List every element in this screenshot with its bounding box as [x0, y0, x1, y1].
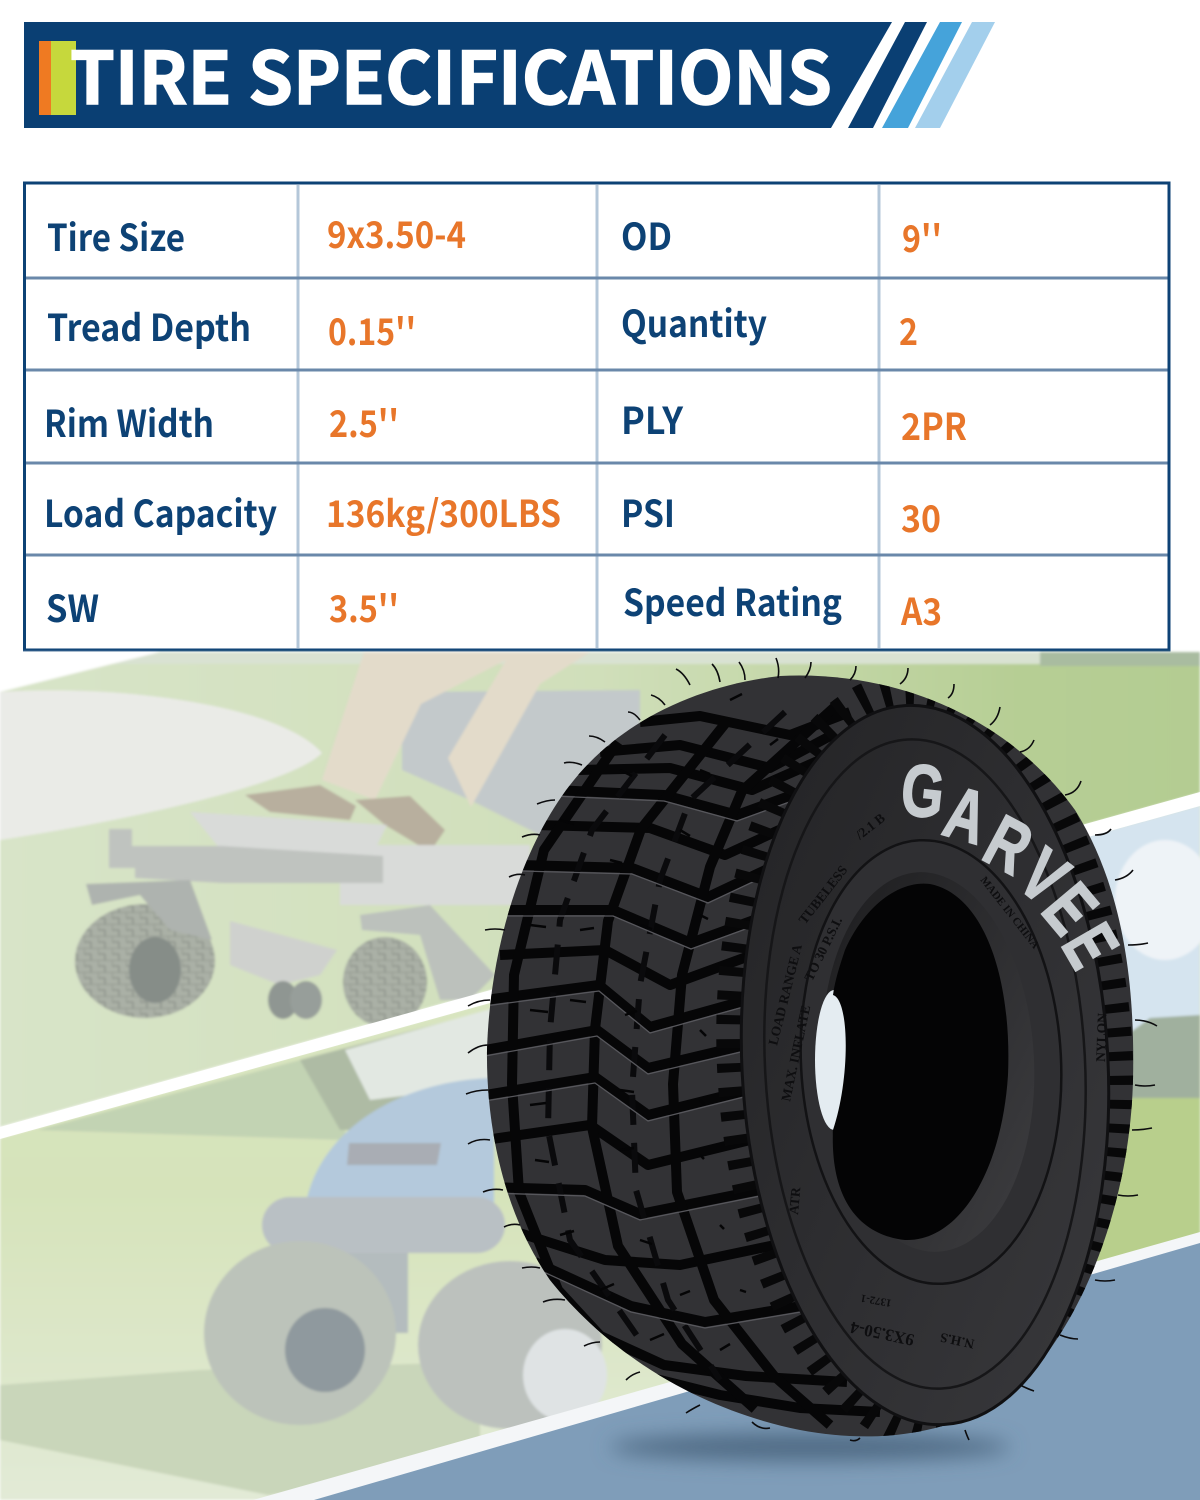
caster balls — [268, 981, 322, 1019]
row: SW and speed rating: 3.5'' — [329, 579, 399, 633]
mower deck plate and frame — [190, 812, 530, 905]
GARVEE logo — [897, 747, 1133, 981]
GARVEE logo: E — [1027, 868, 1114, 949]
row: tire size and OD: 9x3.50-4 — [327, 205, 466, 259]
front wheel right — [343, 905, 495, 1027]
sidewall lettering: NYLON — [1093, 1013, 1110, 1062]
grass shadow — [0, 1362, 480, 1495]
right wheel — [418, 1261, 607, 1429]
mower arm — [109, 829, 383, 883]
hood vent — [347, 1143, 441, 1165]
sidewall lettering: MAX. INFLATE — [778, 1004, 813, 1103]
tread grooves — [485, 694, 880, 1425]
rider shoes — [245, 785, 445, 852]
sidewall lettering: MADE IN CHINA — [978, 874, 1041, 951]
row: rim width and PLY: PLY — [621, 391, 684, 445]
row: SW and speed rating: A3 — [900, 582, 942, 636]
sidewall lettering: ATR — [786, 1186, 803, 1215]
tree line dark — [300, 1010, 490, 1130]
left wheel — [204, 1241, 396, 1425]
row: tread depth and quantity: 0.15'' — [328, 302, 416, 356]
inner lip — [812, 867, 1044, 1257]
GARVEE logo: R — [972, 799, 1045, 891]
row: rim width and PLY — [44, 391, 967, 451]
row: SW and speed rating: SW — [46, 579, 99, 633]
windshield — [345, 1008, 494, 1100]
sidewall lettering: 9X3.50-4 — [848, 1318, 916, 1350]
grille — [298, 1253, 408, 1333]
row: load capacity and PSI: 136kg/300LBS — [326, 484, 561, 538]
row: tread depth and quantity: 2 — [899, 302, 918, 356]
accent orange — [39, 41, 51, 115]
specifications table — [24, 183, 1169, 650]
banner stripe light blue — [915, 22, 995, 128]
row: tire size and OD: OD — [621, 207, 672, 261]
row: tire size and OD: 9'' — [902, 209, 942, 263]
rider legs — [322, 652, 590, 807]
tire shadow — [610, 1433, 1010, 1461]
row: rim width and PLY: 2.5'' — [329, 394, 399, 448]
title: TIRE SPECIFICATIONS — [70, 20, 832, 125]
GARVEE logo: E — [1046, 911, 1133, 981]
bead ring — [790, 834, 1072, 1290]
row: load capacity and PSI: Load Capacity — [44, 484, 277, 538]
banner stripe navy — [848, 22, 927, 128]
row: load capacity and PSI: 30 — [901, 489, 941, 543]
shoulder teeth — [714, 678, 1136, 1446]
tree line — [38, 1048, 345, 1140]
sidewall lettering: TO 30 P.S.I. — [801, 914, 845, 983]
row: SW and speed rating: Speed Rating — [623, 573, 842, 627]
sidewall — [723, 696, 1127, 1434]
mower hood — [306, 1078, 494, 1205]
sidewall lettering: /2.1 B — [852, 810, 888, 843]
white diagonal band upper — [0, 792, 1200, 1139]
row: rim width and PLY: 2PR — [901, 397, 967, 451]
row: SW and speed rating — [46, 573, 942, 636]
row: tire size and OD — [47, 205, 942, 263]
distant lawn — [1090, 1098, 1200, 1270]
row: tire size and OD: Tire Size — [47, 208, 185, 262]
rubber whiskers — [466, 658, 1157, 1441]
GARVEE logo: A — [936, 770, 996, 860]
row: tread depth and quantity: Tread Depth — [47, 298, 251, 352]
curved path — [0, 690, 322, 840]
sidewall lettering: 1372-1 — [860, 1292, 893, 1309]
sidewall lettering: TUBELESS — [796, 863, 850, 927]
mower cutting deck — [230, 921, 337, 985]
accent lime — [51, 41, 76, 115]
GARVEE logo: G — [897, 747, 948, 834]
front wheel left — [75, 880, 215, 1018]
sidewall lettering — [765, 810, 1110, 1352]
table grid — [24, 183, 1169, 650]
sidewall lettering: LOAD RANGE A — [765, 942, 805, 1047]
banner stripe blue — [882, 22, 962, 128]
row: load capacity and PSI: PSI — [621, 484, 675, 538]
sidewall ridge — [748, 731, 1102, 1397]
sidewall lettering: N.H.S — [939, 1330, 976, 1352]
row: load capacity and PSI — [44, 484, 941, 543]
seat and rear body — [402, 690, 640, 835]
background photo: lower mower on lawn — [0, 804, 1200, 1500]
see-through gap — [815, 990, 853, 1130]
tire body — [487, 676, 1133, 1436]
bumper — [262, 1197, 505, 1253]
header banner — [24, 20, 995, 128]
blue floor — [253, 1232, 1200, 1500]
GARVEE logo: V — [1004, 832, 1084, 920]
row: tread depth and quantity — [47, 294, 918, 356]
clouds — [1115, 840, 1200, 960]
tire bore — [833, 884, 1008, 1240]
background photo: upper mower on grass — [0, 652, 1200, 1127]
trees — [1120, 1015, 1200, 1100]
tire — [466, 658, 1157, 1446]
background photo: right sky and trees — [1080, 805, 1200, 1270]
banner bar — [24, 22, 892, 128]
row: rim width and PLY: Rim Width — [44, 394, 214, 448]
row: tread depth and quantity: Quantity — [621, 294, 767, 348]
